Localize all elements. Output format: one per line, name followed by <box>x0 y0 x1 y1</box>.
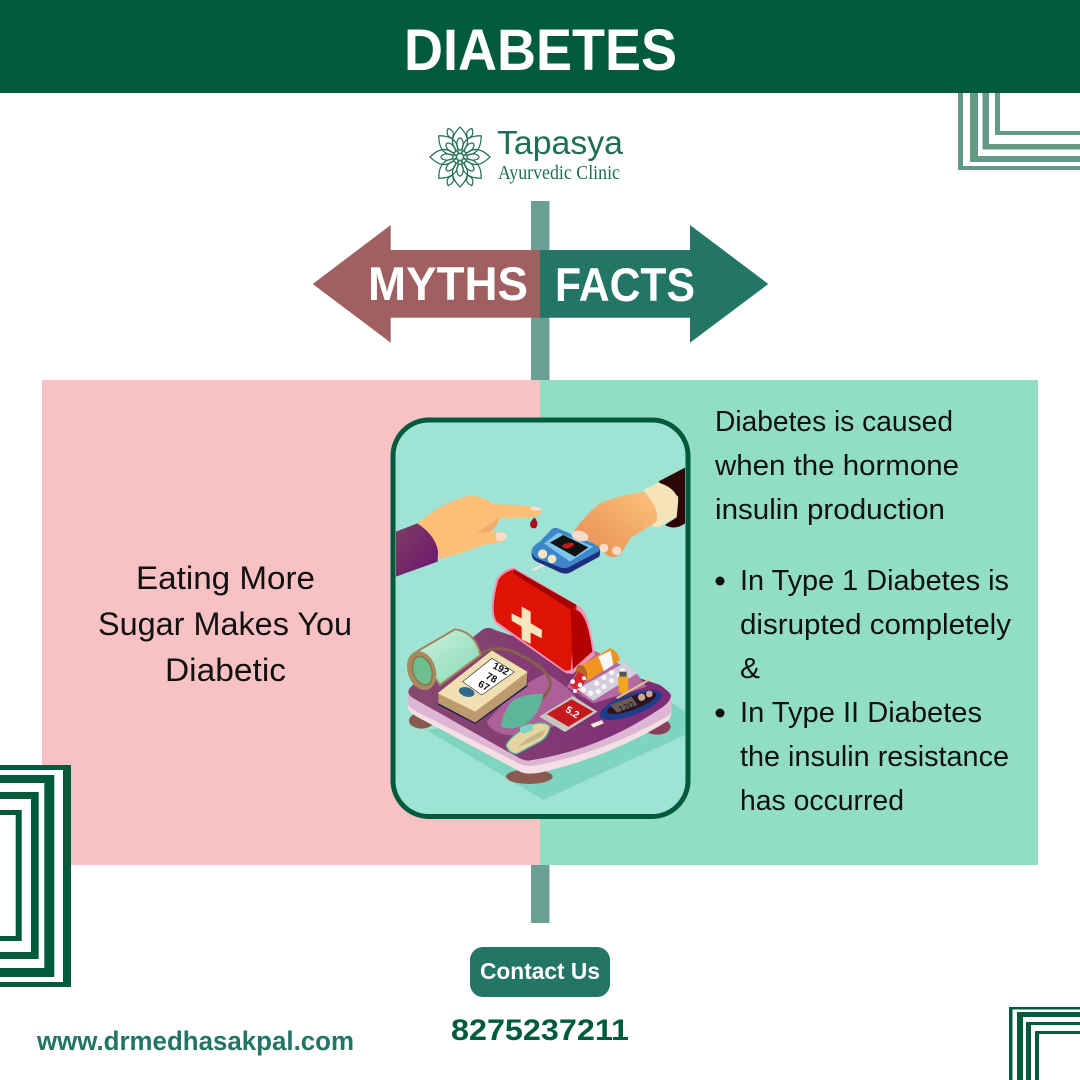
fact bullet: type 2 <box>716 697 1009 817</box>
facts arrow <box>540 225 768 343</box>
smartphone readout <box>539 696 598 732</box>
blood pressure monitor <box>438 651 527 724</box>
myths arrow <box>313 225 540 343</box>
fact intro: when the hormone <box>714 450 959 482</box>
glucometer device: 120 <box>617 700 635 715</box>
medicine bottle and spilled pills <box>570 648 620 693</box>
fact bullet: type 1: disrupted completely <box>740 609 1011 641</box>
smartphone readout: 5.2 <box>563 705 581 721</box>
left hand with sleeve <box>396 496 542 577</box>
central divider post <box>531 201 550 923</box>
facts label: FACTS <box>555 258 695 311</box>
weighing scale platform <box>408 628 671 784</box>
myth statement: Diabetic <box>165 652 286 688</box>
myth statement: Sugar Makes You <box>98 606 352 642</box>
logo: Tapasya Ayurvedic Clinic <box>430 124 624 187</box>
fact intro <box>714 406 959 526</box>
decorative corner: top right <box>958 93 1080 170</box>
green cushion and strap <box>501 694 550 754</box>
fact intro: Diabetes is caused <box>715 406 953 438</box>
logo subtitle: Ayurvedic Clinic <box>498 162 620 184</box>
website: www.drmedhasakpal.com <box>36 1026 354 1056</box>
fact bullet: type 1 <box>716 565 1011 685</box>
blood drop <box>530 517 537 528</box>
fact bullet: type 1: & <box>740 653 760 685</box>
glucose meter held by hand <box>532 528 600 574</box>
blood pressure monitor: 78 <box>484 671 499 686</box>
myth statement <box>98 560 352 688</box>
fact bullet: type 2: In Type II Diabetes <box>740 697 982 729</box>
blood pressure monitor: 192 <box>491 661 511 678</box>
first aid bag <box>492 567 595 674</box>
fact intro: insulin production <box>715 494 945 526</box>
decorative corner: bottom right <box>1009 1007 1080 1080</box>
insulin vial and syringe <box>607 672 652 705</box>
floor shadow <box>427 697 685 800</box>
logo name: Tapasya <box>497 124 624 161</box>
blister pack <box>577 663 637 701</box>
decorative corner: bottom left <box>0 765 71 987</box>
phone number: 8275237211 <box>451 1014 629 1047</box>
title: DIABETES <box>404 18 677 83</box>
fact bullet: type 2: has occurred <box>740 785 904 817</box>
header banner <box>0 0 1080 93</box>
contact button: Contact Us <box>480 958 600 984</box>
panel: fact <box>540 380 1038 865</box>
illustration card: diabetes kit <box>393 420 688 816</box>
blood pressure cuff roll <box>402 629 481 694</box>
blood pressure monitor: 67 <box>476 679 491 694</box>
glucometer device <box>591 684 665 728</box>
logo mandala icon <box>430 127 490 187</box>
myths label: MYTHS <box>368 257 528 310</box>
fact bullet: type 2: the insulin resistance <box>740 741 1009 773</box>
fact bullet: type 1: In Type 1 Diabetes is <box>740 565 1009 597</box>
contact button <box>470 947 610 997</box>
panel: myth <box>42 380 540 865</box>
myth statement: Eating More <box>136 560 315 596</box>
right hand with sleeve <box>570 468 685 557</box>
monitor tube <box>482 649 550 703</box>
